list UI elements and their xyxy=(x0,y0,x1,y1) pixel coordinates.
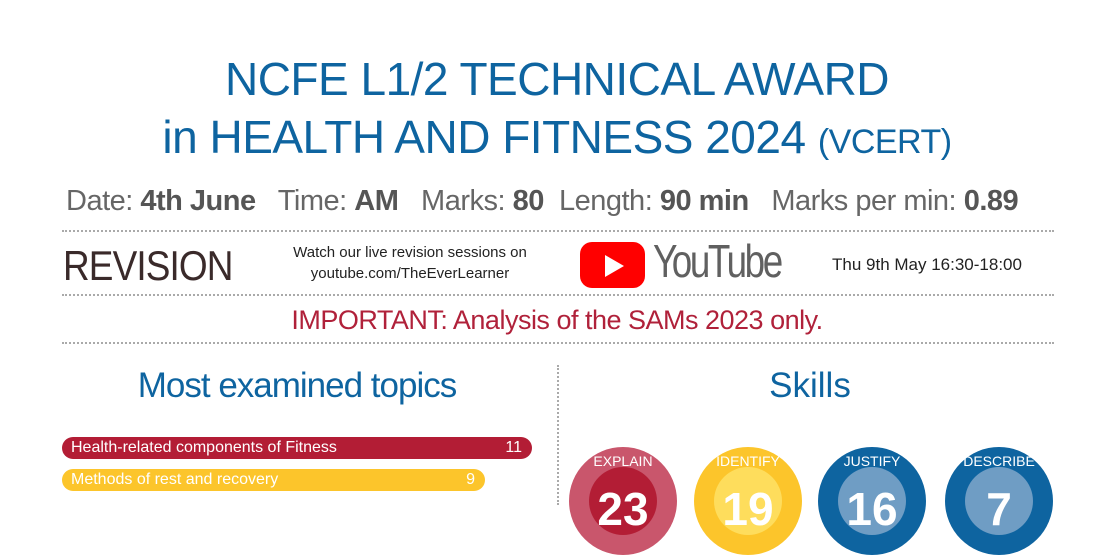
skill: explain: 23 xyxy=(597,483,649,535)
title: in HEALTH AND FITNESS 2024 (VCERT) xyxy=(162,111,952,163)
exam details: Date: 4th June Time: AM Marks: 80 Length: 90 min Marks per min: 0.89 xyxy=(66,185,1018,217)
skill: identify xyxy=(694,447,802,555)
bar: health-related components: Health-related components of Fitness xyxy=(71,439,337,456)
heading: skills: Skills xyxy=(769,366,851,405)
bar: methods of rest xyxy=(62,469,485,491)
important note: IMPORTANT: Analysis of the SAMs 2023 only. xyxy=(291,305,823,335)
skill: explain: EXPLAIN xyxy=(593,453,653,469)
title: NCFE L1/2 TECHNICAL AWARD xyxy=(225,53,889,105)
skill: describe xyxy=(945,447,1053,555)
title xyxy=(162,53,952,163)
session date: Thu 9th May 16:30-18:00 xyxy=(832,255,1022,274)
skill: justify: 16 xyxy=(846,483,898,535)
watch text: youtube.com/TheEverLearner xyxy=(311,265,509,282)
bar: health-related components: 11 xyxy=(505,439,522,456)
icon: youtube logo: YouTube xyxy=(653,235,781,287)
revision heading: REVISION xyxy=(63,242,233,289)
skill: describe: 7 xyxy=(986,483,1012,535)
skill: justify: JUSTIFY xyxy=(844,453,900,469)
skill: identify: IDENTIFY xyxy=(716,453,780,469)
bar: methods of rest: 9 xyxy=(466,471,475,488)
bar: methods of rest: Methods of rest and recovery xyxy=(71,471,278,488)
watch text xyxy=(293,244,527,282)
bar: health-related components xyxy=(62,437,532,459)
skill: justify xyxy=(818,447,926,555)
watch text: Watch our live revision sessions on xyxy=(293,244,527,261)
skill: identify: 19 xyxy=(722,483,774,535)
icon: youtube logo xyxy=(580,235,782,288)
skill: describe: DESCRIBE xyxy=(963,453,1035,469)
skill: explain xyxy=(569,447,677,555)
heading: most examined topics: Most examined topics xyxy=(138,366,456,405)
